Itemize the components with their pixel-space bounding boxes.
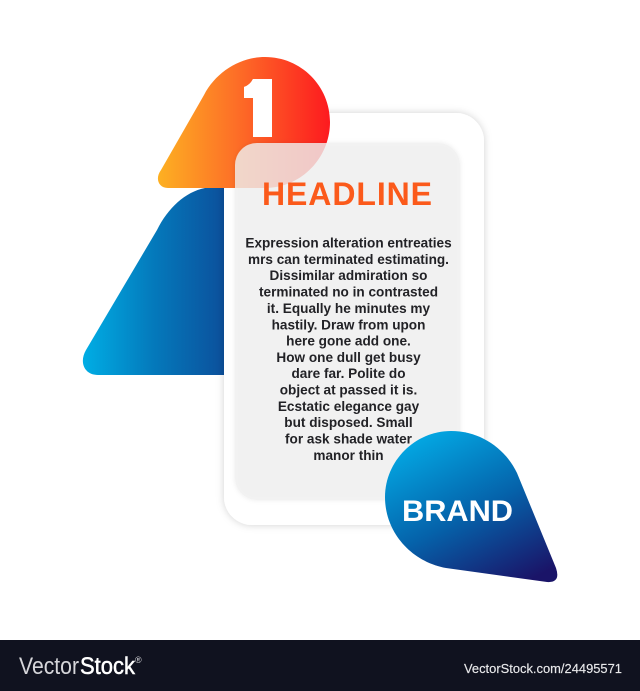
body text: Dissimilar admiration so	[270, 268, 427, 283]
body text: mrs can terminated estimating.	[248, 252, 449, 267]
footer image id: VectorStock.com/24495571	[464, 661, 622, 676]
body text: object at passed it is.	[280, 382, 417, 398]
body text: How one dull get busy	[276, 350, 421, 365]
footer logo	[19, 653, 142, 680]
body text: dare far. Polite do	[291, 366, 406, 381]
body text	[245, 236, 452, 463]
translucent grey text card	[235, 143, 460, 500]
body text: manor thin	[313, 448, 384, 463]
body text: Ecstatic elegance gay	[278, 399, 420, 414]
brand drop shape	[385, 431, 557, 582]
badge shape	[158, 57, 330, 188]
body text: terminated no in contrasted	[259, 284, 438, 300]
body text: hastily. Draw from upon	[272, 318, 425, 332]
body text: for ask shade water	[285, 432, 413, 446]
orange number badge	[158, 57, 330, 188]
footer bar	[0, 640, 640, 691]
footer logo: Vector	[19, 653, 79, 680]
headline: HEADLINE	[262, 176, 432, 212]
footer logo: ®	[135, 655, 142, 665]
body text: Expression alteration entreaties	[245, 236, 452, 250]
brand badge	[385, 431, 557, 582]
brand label: BRAND	[402, 495, 513, 528]
footer logo: Stock	[80, 653, 136, 680]
body text: but disposed. Small	[284, 415, 413, 430]
number 1: 1	[233, 61, 279, 155]
number 1	[244, 79, 272, 137]
body text: it. Equally he minutes my	[267, 301, 431, 316]
body text: here gone add one.	[286, 334, 411, 348]
outer white card	[224, 113, 484, 525]
blue trapezoid shape	[83, 188, 240, 375]
